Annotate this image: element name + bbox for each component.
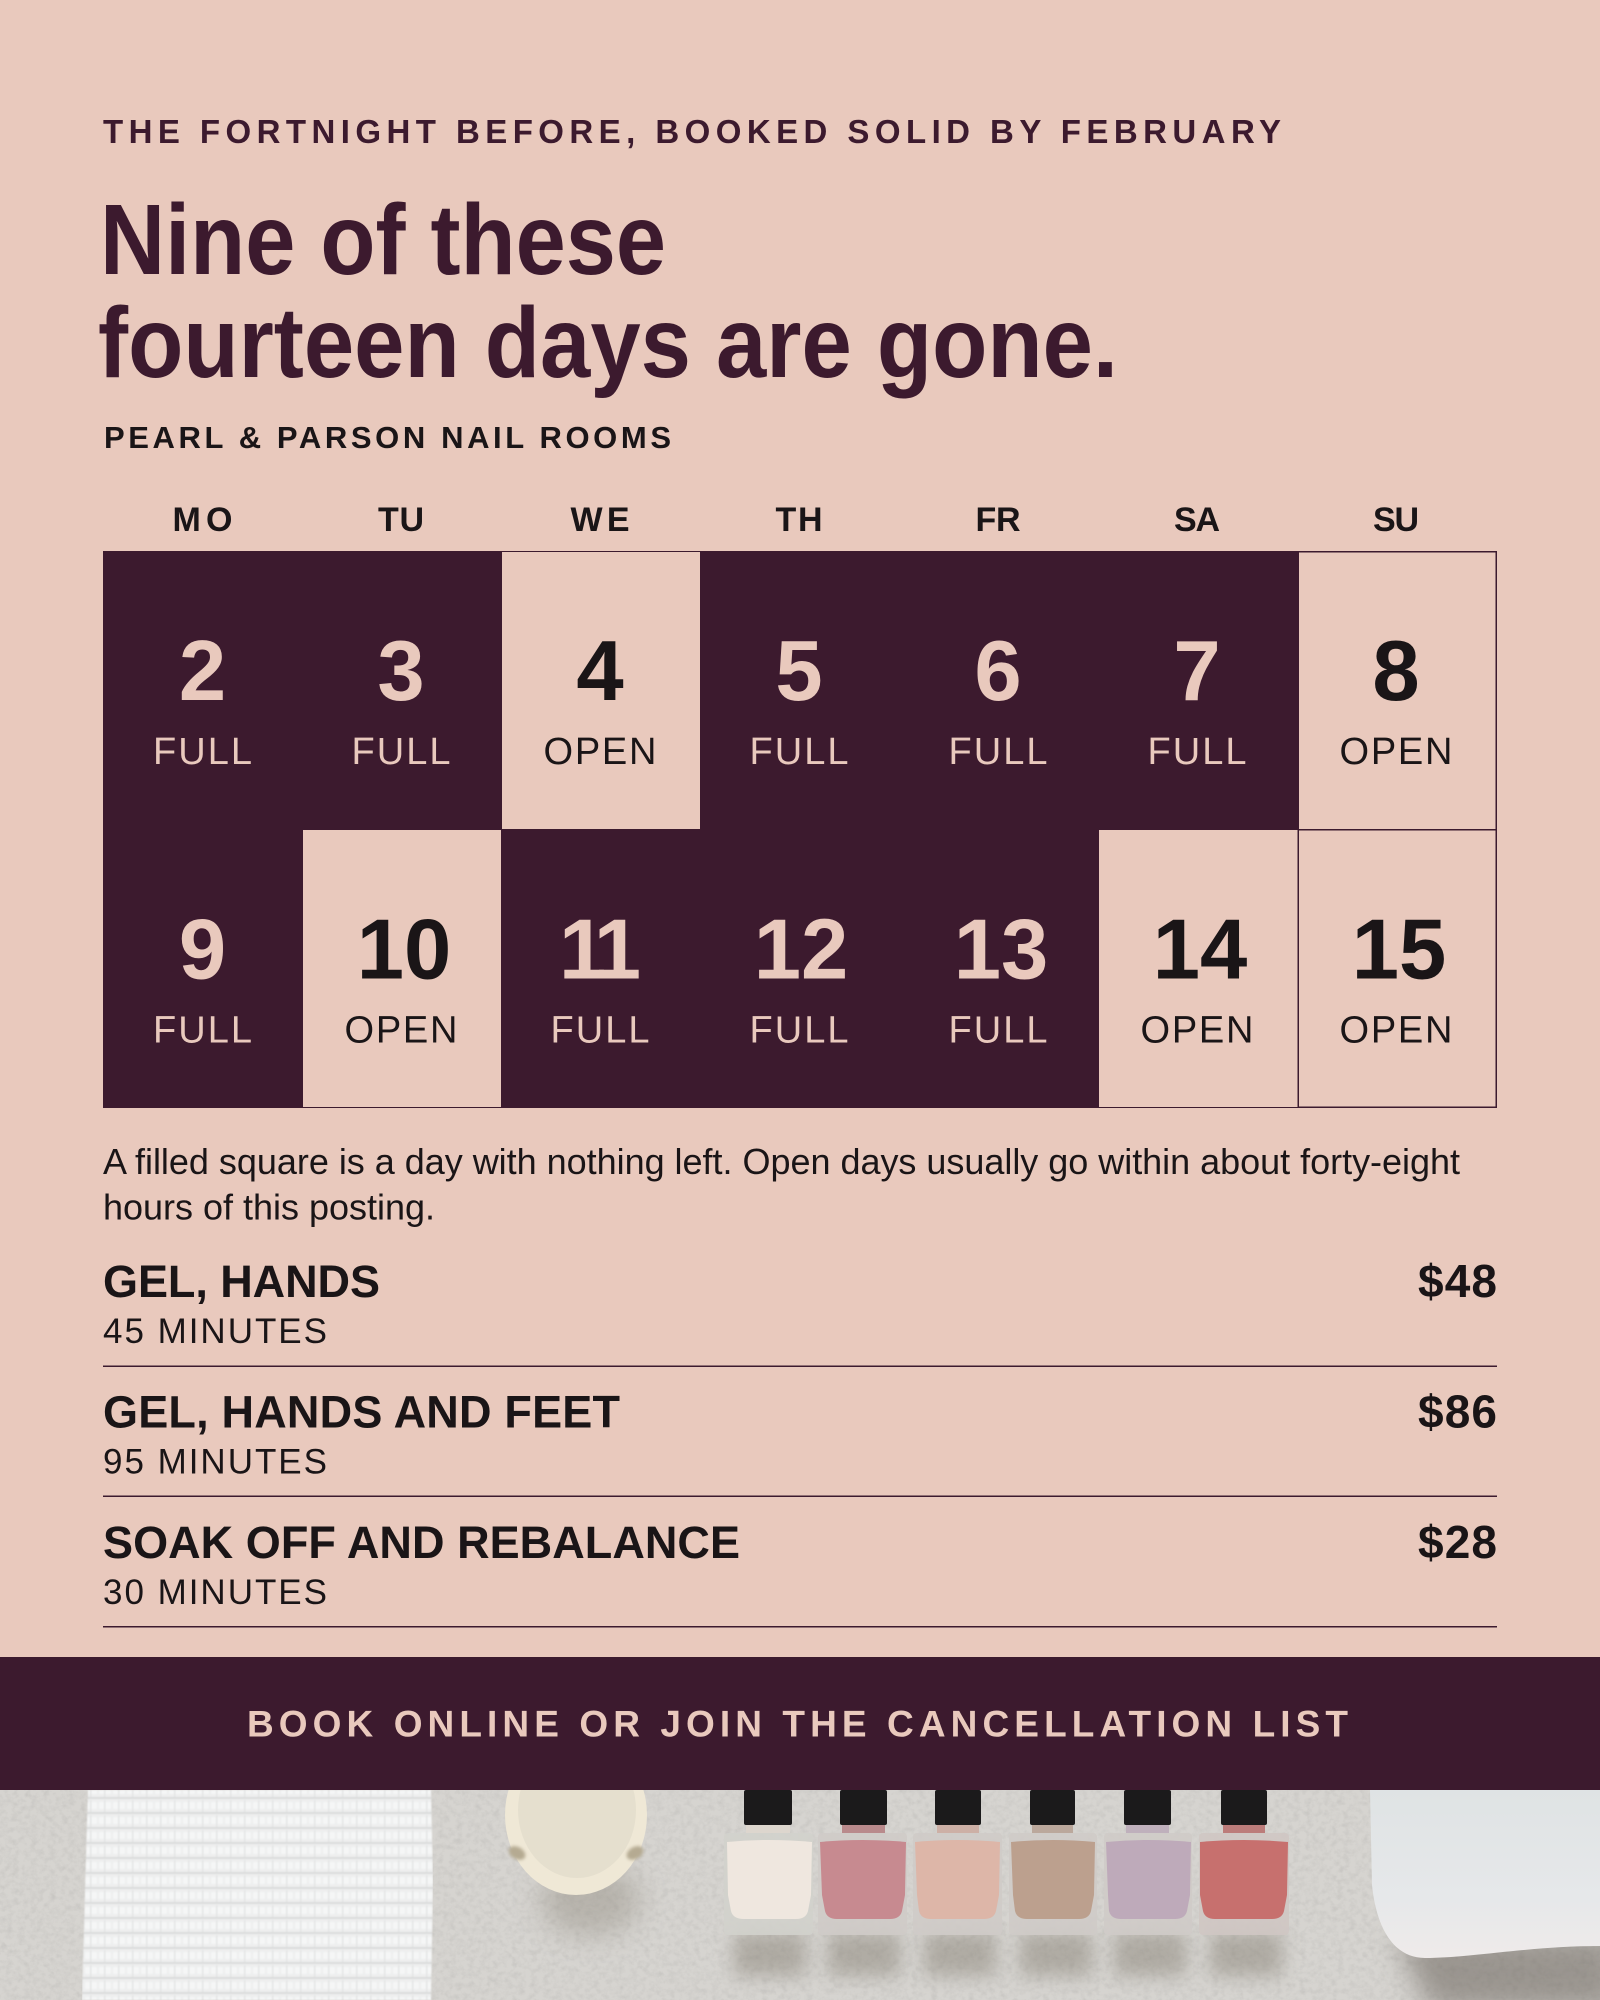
open cell: day 10 <box>303 830 501 1107</box>
full cell: day 12: 12 <box>754 902 848 998</box>
full cell: day 6: 6 <box>974 624 1022 719</box>
full cell: day 12: FULL <box>750 1010 848 1052</box>
full cell: day 3: FULL <box>352 731 450 773</box>
legend note: hours of this posting. <box>103 1186 435 1228</box>
open cell: day 14 <box>1099 830 1298 1107</box>
studio name: PEARL & PARSON NAIL ROOMS <box>104 420 671 455</box>
full cell: day 11: FULL <box>550 1010 650 1052</box>
full cell: day 13 <box>948 902 1048 1052</box>
open cell: day 8: 8 <box>1372 624 1420 719</box>
legend note <box>103 1141 1460 1228</box>
open cell: day 4: 4 <box>576 624 624 719</box>
eyebrow: THE FORTNIGHT BEFORE, BOOKED SOLID BY FEBRUARY <box>103 113 1281 150</box>
open cell: day 10: OPEN <box>344 1010 458 1052</box>
weekday header: WE <box>570 501 630 539</box>
open cell: day 10: 10 <box>357 902 451 998</box>
bowl <box>505 1790 647 1944</box>
weekday header: SA <box>1174 501 1220 539</box>
open cell: day 8: OPEN <box>1340 731 1452 773</box>
weekday header: FR <box>976 501 1020 539</box>
full cell: day 7: 7 <box>1173 624 1221 719</box>
open cell: day 14: 14 <box>1153 902 1247 998</box>
service row: gel hands and feet: $86 <box>1418 1386 1497 1438</box>
service row: gel hands: GEL, HANDS <box>103 1256 380 1307</box>
full cell: day 11 <box>550 902 650 1052</box>
calendar grid <box>103 551 1497 1108</box>
photo strip: salon still life <box>0 1790 1600 2000</box>
service row: gel hands and feet <box>103 1386 1497 1497</box>
open cell: day 15 <box>1298 830 1496 1107</box>
open cell: day 15: 15 <box>1352 902 1446 998</box>
nail polish bottle: ivory <box>724 1790 813 1976</box>
nail polish bottle: taupe <box>1009 1790 1097 1976</box>
open cell: day 4 <box>502 552 700 829</box>
title: Nine of these <box>100 184 666 296</box>
full cell: day 9: 9 <box>179 902 226 998</box>
full cell: day 3 <box>352 624 450 773</box>
call to action banner: BOOK ONLINE OR JOIN THE CANCELLATION LIST <box>247 1704 1348 1744</box>
nail polish bottle: lilac <box>1104 1790 1192 1976</box>
service row: gel hands: 45 MINUTES <box>103 1312 327 1351</box>
service row: soak off and rebalance: 30 MINUTES <box>103 1573 327 1612</box>
open cell: day 15: OPEN <box>1340 1010 1452 1052</box>
open cell: day 8 <box>1298 552 1496 830</box>
call to action banner <box>0 1657 1600 1790</box>
open cell: day 4: OPEN <box>544 731 656 773</box>
legend note: A filled square is a day with nothing left. Open days usually go within about forty-eight <box>103 1141 1460 1182</box>
weekday header: TH <box>776 501 822 539</box>
full cell: day 11: 11 <box>559 902 641 998</box>
weekday header <box>172 501 1419 539</box>
title <box>98 184 1118 399</box>
full cell: day 13: FULL <box>948 1010 1048 1052</box>
full cell: day 7: FULL <box>1148 731 1246 773</box>
full cell: day 5: 5 <box>775 624 823 719</box>
full cell: day 9 <box>153 902 252 1052</box>
weekday header: TU <box>378 501 424 539</box>
nail polish bottle: rose <box>818 1790 907 1976</box>
full cell: day 2: FULL <box>153 731 252 773</box>
full cell: day 2: 2 <box>179 624 226 719</box>
white lamp <box>1370 1790 1600 2000</box>
service row: soak off and rebalance: SOAK OFF AND REBALANCE <box>103 1517 740 1568</box>
full cell: day 2 <box>153 624 252 773</box>
full cell: day 13: 13 <box>954 902 1048 998</box>
nail polish bottle: coral <box>1199 1790 1289 1976</box>
open cell: day 14: OPEN <box>1140 1010 1254 1052</box>
service row: gel hands and feet: 95 MINUTES <box>103 1442 327 1482</box>
service row: soak off and rebalance <box>103 1516 1497 1628</box>
service row: soak off and rebalance: $28 <box>1418 1516 1497 1568</box>
weekday header: MO <box>172 501 232 539</box>
full cell: day 7 <box>1148 624 1246 773</box>
full cell: day 9: FULL <box>153 1010 252 1052</box>
full cell: day 12 <box>750 902 848 1052</box>
nail polish bottle: blush <box>913 1790 1002 1976</box>
calendar fill: booked days <box>103 551 1497 1108</box>
full cell: day 3: 3 <box>377 624 425 719</box>
service row: gel hands and feet: GEL, HANDS AND FEET <box>103 1386 620 1438</box>
full cell: day 5: FULL <box>750 731 848 773</box>
full cell: day 6: FULL <box>948 731 1048 773</box>
full cell: day 5 <box>750 624 848 773</box>
service row: gel hands: $48 <box>1418 1255 1497 1307</box>
concrete surface <box>0 1790 1600 2000</box>
title: fourteen days are gone. <box>98 287 1118 399</box>
service row: gel hands <box>103 1255 1497 1367</box>
weekday header: SU <box>1373 501 1419 539</box>
full cell: day 6 <box>948 624 1048 773</box>
towel <box>82 1790 433 2000</box>
